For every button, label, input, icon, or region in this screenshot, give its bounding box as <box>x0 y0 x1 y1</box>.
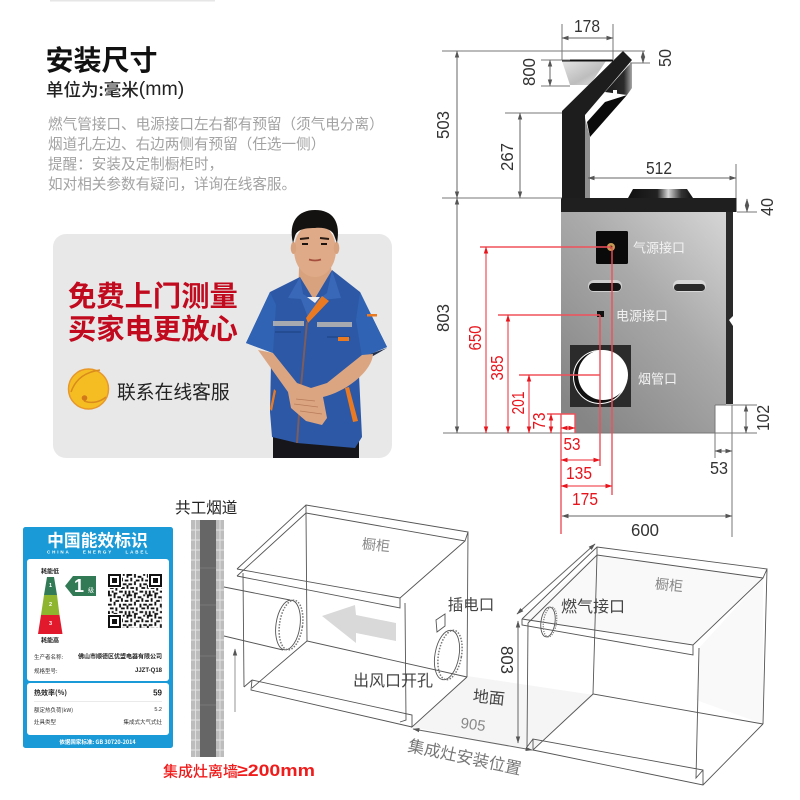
gray dimension numbers: 267 <box>497 143 517 171</box>
stove body panel <box>561 212 726 433</box>
lower white panel <box>27 683 169 735</box>
efficiency grade pyramid <box>38 566 62 644</box>
red dimension numbers: 53 <box>564 434 580 454</box>
cabinet outline <box>522 547 767 785</box>
right cabinet labels: 橱柜 <box>654 574 684 596</box>
installation notes: 提醒：安装及定制橱柜时， <box>48 156 223 173</box>
right cabinet panel shading <box>522 555 763 724</box>
subtitle: unit: 单位为:毫米(mm) <box>46 76 184 102</box>
gray dimension numbers: 102 <box>753 405 773 431</box>
promo headline <box>68 280 238 345</box>
gray dimension numbers: 53 <box>710 458 728 478</box>
efficiency grade pyramid: 3 <box>49 621 52 627</box>
efficiency grade pyramid: 耗能高 <box>41 636 59 644</box>
cooktop burner <box>628 189 693 198</box>
left cabinet labels: 集成灶安装位置 <box>406 732 524 780</box>
installation notes <box>48 115 384 193</box>
right black side strip <box>726 212 733 404</box>
cabinet dimension arrows <box>413 544 595 750</box>
manufacturer details <box>34 652 163 675</box>
efficiency data: 热效率(%) <box>34 688 67 698</box>
small up arrow <box>234 649 236 712</box>
efficiency data: 59 <box>153 688 163 698</box>
counter top <box>561 198 736 212</box>
grade 1 arrow tag <box>65 576 96 596</box>
gray dimension numbers: 800 <box>519 58 539 86</box>
icon: yellow service bell <box>68 369 108 409</box>
technician photo illustration <box>246 210 387 458</box>
outlet opening <box>431 628 466 682</box>
power port <box>597 311 604 317</box>
red dimension numbers <box>465 325 598 509</box>
title: 安装尺寸 <box>46 39 158 79</box>
red dimension numbers: 135 <box>566 463 592 483</box>
upper white panel <box>27 559 169 681</box>
standard footer: 依据国家标准: GB 30720-2014 <box>59 738 136 746</box>
right cabinet labels: 803 <box>497 646 517 674</box>
red dimension numbers: 650 <box>465 325 485 350</box>
efficiency data: 灶具类型 <box>34 718 57 726</box>
installation notes: 烟道孔左边、右边两侧有预留（任选一侧） <box>48 136 325 153</box>
efficiency grade pyramid: 1 <box>49 583 52 589</box>
efficiency grade pyramid: 耗能低 <box>41 566 59 576</box>
grade 1 arrow tag: 级 <box>88 586 94 594</box>
gray dimension numbers: 512 <box>646 158 672 178</box>
promo headline: 免费上门测量 <box>68 280 238 312</box>
range hood canopy <box>562 60 613 85</box>
product diagram: side view of integrated stove <box>561 51 736 433</box>
plug socket opening <box>436 614 445 632</box>
port labels <box>616 238 685 388</box>
gas hole <box>539 606 559 638</box>
panel: free measurement promotion <box>53 210 392 458</box>
red dimension numbers: 201 <box>508 392 528 414</box>
manufacturer details: 生产者名称: <box>34 653 64 661</box>
gray dimension numbers: 600 <box>631 520 659 540</box>
gray dimension numbers: 503 <box>433 111 453 139</box>
gray dimension numbers: 178 <box>574 16 600 36</box>
wall clearance note: 集成灶离墙 <box>163 760 238 782</box>
port labels: 烟管口 <box>638 368 677 388</box>
efficiency data <box>34 688 163 726</box>
port labels: 气源接口 <box>633 238 685 256</box>
wall clearance note: ≥200mm <box>237 762 315 780</box>
right cabinet diagram <box>413 544 767 785</box>
manufacturer details: 规格型号: <box>34 667 58 675</box>
cropped header text remnant <box>50 0 215 2</box>
floor shading <box>412 676 594 750</box>
gray dimension numbers <box>433 16 777 540</box>
installation notes: 燃气管接口、电源接口左右都有预留（须气电分离） <box>48 115 384 133</box>
left cabinet labels: 地面 <box>472 682 506 710</box>
efficiency grade pyramid: 2 <box>49 602 52 608</box>
efficiency data: 额定热负荷(kW) <box>34 706 73 714</box>
vent slots <box>588 280 706 292</box>
gas port box <box>596 231 628 264</box>
flue duct column <box>562 51 632 198</box>
red dimension numbers: 73 <box>529 412 549 430</box>
gray dimension numbers: 40 <box>757 198 777 216</box>
shared flue wall column <box>191 520 224 757</box>
energy label <box>23 527 173 748</box>
left cabinet labels: 橱柜 <box>361 534 391 556</box>
gray dimension lines <box>442 24 757 537</box>
left cabinet diagram <box>224 505 468 727</box>
red dimension lines <box>480 247 612 534</box>
right cabinet labels <box>497 574 684 674</box>
right cabinet labels: 燃气接口 <box>561 593 625 617</box>
red dimension numbers: 385 <box>487 356 507 380</box>
shared flue label: 共工烟道 <box>175 496 237 518</box>
left cabinet labels: 出风口开孔 <box>353 667 433 691</box>
efficiency data: 集成式大气式灶 <box>123 718 162 726</box>
manufacturer details: 佛山市顺德区优盟电器有限公司 <box>78 652 162 660</box>
manufacturer details: JJZT-Q18 <box>135 668 163 674</box>
left cabinet labels: 插电口 <box>448 593 494 615</box>
cabinet outline <box>237 505 468 727</box>
installation notes: 如对相关参数有疑问，详询在线客服。 <box>48 176 296 193</box>
wall clearance note <box>163 760 315 782</box>
QR code <box>107 573 163 629</box>
label title: 中国能效标识 <box>47 528 148 552</box>
label subtitle: CHINA ENERGY LABEL <box>47 550 148 554</box>
airflow arrow <box>322 605 396 643</box>
flue port <box>570 345 631 407</box>
grade 1 arrow tag: 1 <box>74 576 84 596</box>
flue pipe hole <box>224 587 306 651</box>
efficiency data: 5.2 <box>154 707 162 713</box>
red dimension numbers: 175 <box>572 489 598 509</box>
port labels: 电源接口 <box>616 306 668 324</box>
contact text: 联系在线客服 <box>117 378 230 404</box>
gray dimension numbers: 803 <box>433 304 453 332</box>
left cabinet labels <box>353 534 524 780</box>
left cabinet labels: 905 <box>459 715 487 735</box>
promo headline: 买家电更放心 <box>68 313 238 345</box>
gray dimension numbers: 50 <box>655 49 675 67</box>
